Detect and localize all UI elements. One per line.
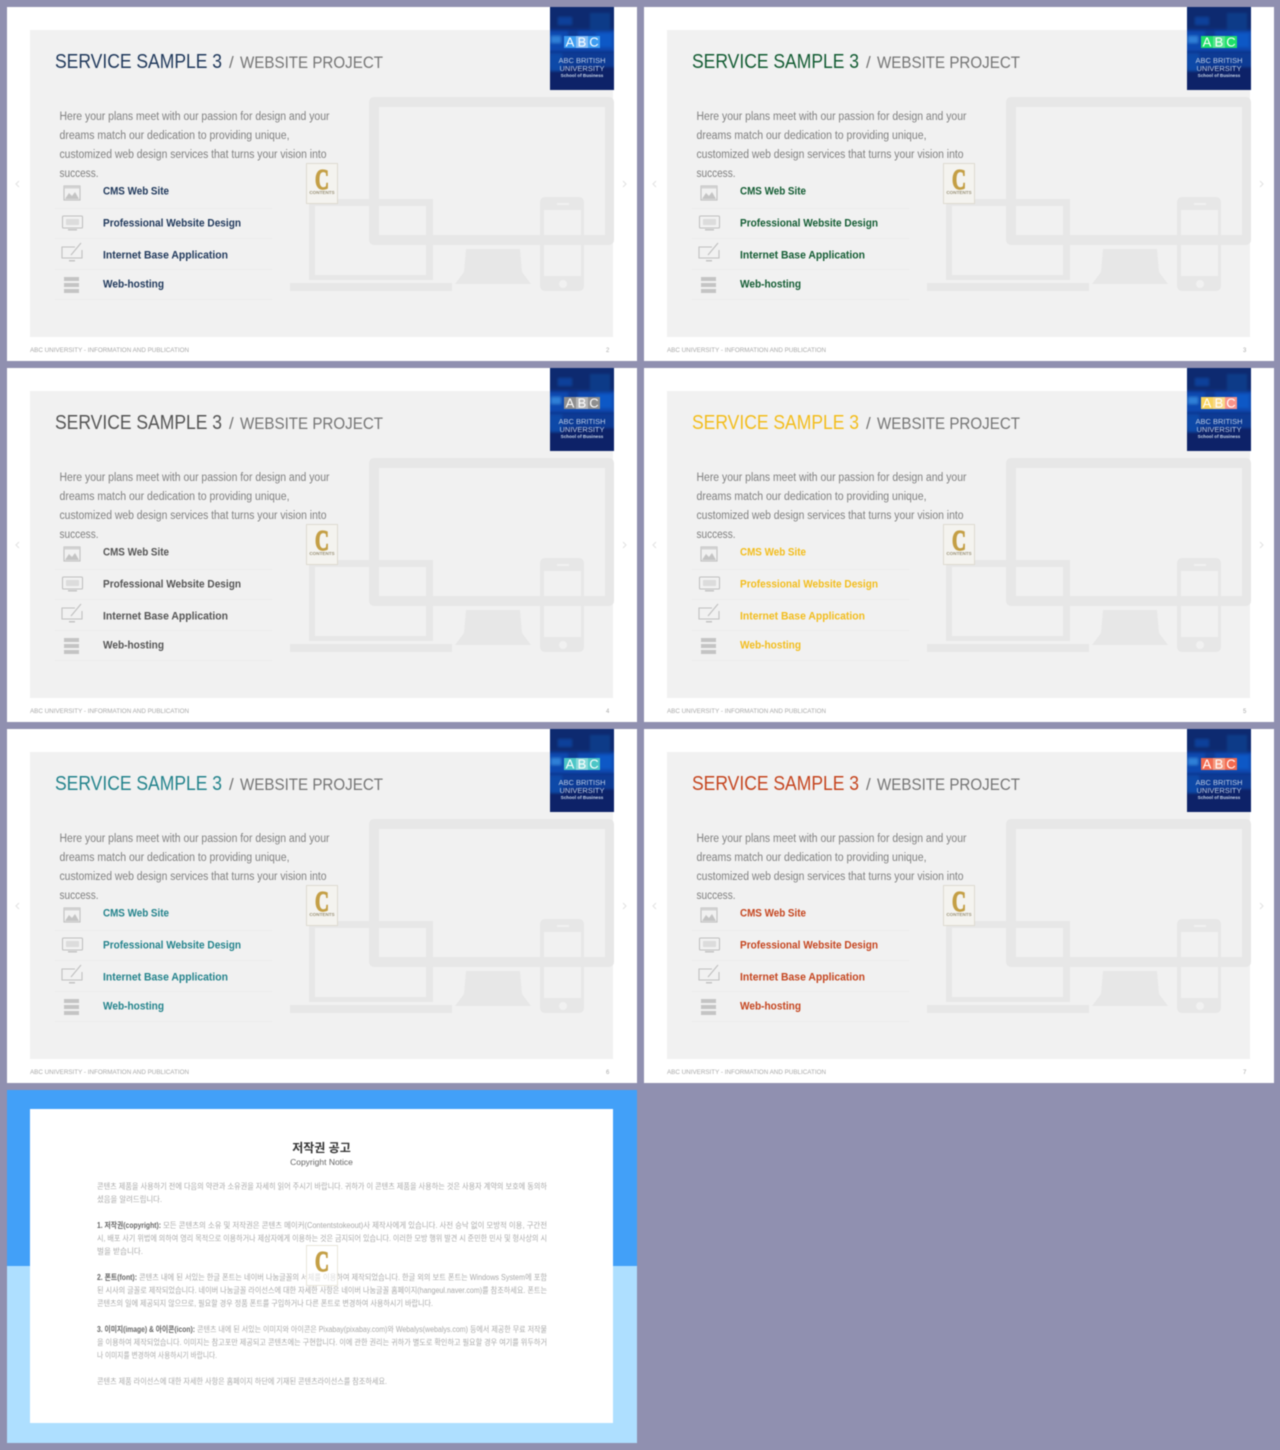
icon: image xyxy=(701,547,717,561)
panel: grey content area xyxy=(667,30,1250,337)
list labels: Web-hosting xyxy=(103,640,164,652)
text block: intro: success. xyxy=(60,529,98,541)
notice body text: 된 시사의 글꼴로 제작되었습니다. 네이버 나눔글꼴 라이선스에 대한 자세한 사항은 네이버 나눔글꼴 홈페이지(hangeul.naver.com)를 참조하세요. 폰트는 xyxy=(97,1285,547,1295)
list labels xyxy=(740,186,878,290)
list labels xyxy=(103,186,241,290)
text block: intro xyxy=(60,472,330,541)
heading: WEBSITE PROJECT xyxy=(240,414,383,433)
list labels: Professional Website Design xyxy=(740,578,878,590)
text block: intro: customized web design services that turns your vision into xyxy=(60,510,326,522)
footer: 3 xyxy=(1243,348,1247,354)
heading xyxy=(55,772,383,795)
panel: grey content area xyxy=(667,752,1250,1059)
slide 2: green xyxy=(644,3,1274,361)
logo badge xyxy=(1183,364,1255,456)
logo badge: ABC BRITISH xyxy=(558,778,606,787)
text block: intro: success. xyxy=(60,890,98,902)
illustration: devices xyxy=(653,97,1263,291)
footer: 2 xyxy=(606,348,610,354)
icon: monitor xyxy=(700,938,720,952)
watermark badge: CONTENTS xyxy=(946,912,972,917)
illustration: devices xyxy=(653,458,1263,652)
panel: grey content area xyxy=(30,752,613,1059)
notice body text: 셨음을 알려드립니다. xyxy=(97,1194,162,1204)
text block: intro: Here your plans meet with our passion for design and your xyxy=(60,111,330,123)
text block: intro: Here your plans meet with our passion for design and your xyxy=(696,111,967,123)
list labels: Web-hosting xyxy=(103,278,164,290)
footer xyxy=(30,1070,610,1076)
list labels: CMS Web Site xyxy=(740,186,806,198)
logo badge: School of Business xyxy=(1198,73,1241,78)
text block: intro: dreams match our dedication to providing unique, xyxy=(696,130,926,142)
heading: / xyxy=(866,414,871,433)
text block: intro: customized web design services that turns your vision into xyxy=(696,871,964,883)
panel: grey content area xyxy=(30,391,613,698)
logo badge: School of Business xyxy=(1198,434,1241,439)
icon: edit screen xyxy=(699,243,719,262)
list labels: Professional Website Design xyxy=(103,940,241,952)
notice body text: 시, 배포 사기 위법에 의하여 영리 목적으로 이용하거나 제삼자에게 이용하는 것은 금지되어 있습니다. 이러한 모방 행위 발견 시 준민한 민사 및 형사상의 시 xyxy=(97,1233,547,1243)
text block: intro: success. xyxy=(60,168,98,180)
icon: server xyxy=(701,277,716,293)
logo badge: B xyxy=(578,34,586,50)
list labels: Internet Base Application xyxy=(740,972,865,984)
heading xyxy=(55,50,383,73)
list labels: Web-hosting xyxy=(103,1000,164,1012)
heading: SERVICE SAMPLE 3 xyxy=(55,772,222,795)
text block: intro xyxy=(696,472,967,541)
service list xyxy=(55,546,272,660)
icon: monitor xyxy=(62,938,82,952)
icon: image xyxy=(64,547,80,561)
text block: intro: Here your plans meet with our passion for design and your xyxy=(60,472,330,484)
heading: WEBSITE PROJECT xyxy=(240,53,383,72)
slide 4: yellow xyxy=(644,364,1274,722)
panel: grey content area xyxy=(667,391,1250,698)
text block: intro: dreams match our dedication to providing unique, xyxy=(696,491,926,503)
logo badge: A xyxy=(1203,756,1212,772)
logo badge: B xyxy=(1215,34,1223,50)
footer: 4 xyxy=(606,709,610,715)
icon: monitor xyxy=(62,577,82,592)
icon: server xyxy=(701,999,716,1015)
notice body text xyxy=(97,1181,548,1386)
icon: server xyxy=(64,277,79,293)
footer: 6 xyxy=(606,1070,610,1076)
watermark badge: CONTENTS xyxy=(309,912,335,917)
watermark badge xyxy=(306,164,338,204)
logo badge: C xyxy=(1226,34,1236,50)
logo badge xyxy=(1183,3,1255,95)
heading: WEBSITE PROJECT xyxy=(877,53,1020,72)
list labels: Internet Base Application xyxy=(103,972,228,984)
watermark badge: C xyxy=(315,165,329,196)
panel: white notice card xyxy=(30,1109,613,1423)
list labels: Professional Website Design xyxy=(103,218,241,230)
watermark badge: CONTENTS xyxy=(946,190,972,195)
watermark badge xyxy=(306,524,338,564)
list labels: Professional Website Design xyxy=(740,218,878,230)
icon: edit screen xyxy=(699,965,719,984)
heading: WEBSITE PROJECT xyxy=(877,414,1020,433)
text block: intro: dreams match our dedication to providing unique, xyxy=(696,852,926,864)
heading xyxy=(692,50,1020,73)
icon: server xyxy=(64,999,79,1015)
footer: 7 xyxy=(1243,1070,1247,1076)
logo badge: UNIVERSITY xyxy=(1196,425,1242,434)
footer: ABC UNIVERSITY - INFORMATION AND PUBLICATION xyxy=(30,1070,189,1076)
footer xyxy=(667,1070,1247,1076)
logo badge: UNIVERSITY xyxy=(559,64,605,73)
notice body text: 벌을 받습니다. xyxy=(97,1246,143,1256)
heading: / xyxy=(229,775,234,794)
notice body text: 콘텐츠 제품을 사용하기 전에 다음의 약관과 소유권을 자세히 읽어 주시기 바랍니다. 귀하가 이 콘텐츠 제품을 사용하는 것은 사용자 계약의 보호에 동의하 xyxy=(97,1181,548,1191)
watermark badge: CONTENTS xyxy=(309,190,335,195)
logo badge: B xyxy=(1215,396,1223,410)
watermark badge: C xyxy=(952,526,966,557)
service list xyxy=(55,186,272,300)
footer xyxy=(30,348,610,354)
logo badge xyxy=(546,364,618,456)
notice body text: 3. 이미지(image) & 아이콘(icon): xyxy=(97,1324,195,1334)
service list xyxy=(692,546,909,660)
logo badge: School of Business xyxy=(1198,795,1241,800)
logo badge: ABC BRITISH xyxy=(558,56,606,65)
list labels: Professional Website Design xyxy=(103,578,241,590)
list labels xyxy=(103,546,241,652)
logo badge: ABC BRITISH xyxy=(1195,778,1243,787)
text block: intro: customized web design services that turns your vision into xyxy=(696,149,964,161)
icon: edit screen xyxy=(699,604,719,622)
watermark badge: C xyxy=(315,526,329,557)
list labels: CMS Web Site xyxy=(103,908,169,920)
list labels: Professional Website Design xyxy=(740,940,878,952)
heading xyxy=(55,411,383,434)
logo badge: ABC BRITISH xyxy=(1195,417,1243,426)
icon: edit screen xyxy=(62,243,82,262)
icon: image xyxy=(701,908,717,922)
logo badge: A xyxy=(1203,34,1212,50)
logo badge: B xyxy=(1215,756,1223,772)
list labels: CMS Web Site xyxy=(740,908,806,920)
heading: / xyxy=(229,414,234,433)
list labels: CMS Web Site xyxy=(103,186,169,198)
heading: SERVICE SAMPLE 3 xyxy=(692,50,859,73)
service list xyxy=(692,908,909,1022)
heading: / xyxy=(866,775,871,794)
list labels: Internet Base Application xyxy=(740,250,865,262)
text block: intro xyxy=(60,111,330,180)
list labels: Internet Base Application xyxy=(103,250,228,262)
watermark badge: CONTENTS xyxy=(946,551,972,556)
footer: ABC UNIVERSITY - INFORMATION AND PUBLICATION xyxy=(667,709,826,715)
watermark badge: C xyxy=(315,887,329,918)
notice title xyxy=(290,1140,353,1167)
logo badge: UNIVERSITY xyxy=(1196,786,1242,795)
heading: WEBSITE PROJECT xyxy=(240,775,383,794)
text block: intro: success. xyxy=(696,168,736,180)
watermark badge: CONTENTS xyxy=(309,551,335,556)
notice body text: 콘텐츠 내에 된 서있는 이미지와 아이콘은 Pixabay(pixabay.com)와 Webalys(webalys.com) 등에서 제공한 무료 저작물 xyxy=(197,1324,547,1334)
heading: SERVICE SAMPLE 3 xyxy=(692,411,859,434)
watermark badge xyxy=(944,164,974,204)
list labels xyxy=(740,546,878,652)
footer: ABC UNIVERSITY - INFORMATION AND PUBLICATION xyxy=(667,1070,826,1076)
logo badge: ABC BRITISH xyxy=(558,417,606,426)
watermark badge: C xyxy=(952,887,966,918)
list labels xyxy=(740,908,878,1012)
notice title: Copyright Notice xyxy=(290,1157,353,1167)
text block: intro: customized web design services that turns your vision into xyxy=(696,510,964,522)
notice body text: 2. 폰트(font): xyxy=(97,1273,137,1282)
logo badge xyxy=(1183,725,1255,817)
heading: / xyxy=(229,53,234,72)
text block: intro: Here your plans meet with our passion for design and your xyxy=(696,472,967,484)
logo badge xyxy=(546,3,618,95)
notice title: 저작권 공고 xyxy=(292,1140,351,1155)
logo badge: UNIVERSITY xyxy=(1196,64,1242,73)
heading: SERVICE SAMPLE 3 xyxy=(55,50,222,73)
logo badge: School of Business xyxy=(561,434,604,439)
slide 3: grey xyxy=(7,364,637,722)
notice body text: 콘텐츠 제품 라이선스에 대한 자세한 사항은 홈페이지 하단에 기재된 콘텐츠라이선스를 참조하세요. xyxy=(97,1376,387,1386)
notice body text: 나 이미지를 변경하여 사용하시기 바랍니다. xyxy=(97,1350,217,1360)
footer xyxy=(30,709,610,715)
text block: intro: customized web design services that turns your vision into xyxy=(60,149,326,161)
footer: 5 xyxy=(1243,709,1247,715)
footer: ABC UNIVERSITY - INFORMATION AND PUBLICATION xyxy=(30,348,189,354)
list labels: CMS Web Site xyxy=(103,546,169,558)
slide 6: red xyxy=(644,725,1274,1083)
watermark badge xyxy=(306,886,338,926)
heading xyxy=(692,772,1020,795)
icon: edit screen xyxy=(62,965,82,984)
text block: intro: dreams match our dedication to providing unique, xyxy=(60,852,290,864)
notice body text: 콘텐츠 내에 된 서있는 한글 폰트는 네이버 나눔글꼴의 서체를 이용하여 제작되었습니다. 한글 외의 보트 폰트는 Windows System에 포함 xyxy=(139,1272,548,1282)
text block: intro: dreams match our dedication to providing unique, xyxy=(60,130,290,142)
icon: monitor xyxy=(700,216,720,230)
list labels: Web-hosting xyxy=(740,1000,801,1012)
slide 7: copyright notice xyxy=(7,1090,637,1443)
logo badge: A xyxy=(566,396,575,410)
text block: intro xyxy=(696,833,967,902)
footer: ABC UNIVERSITY - INFORMATION AND PUBLICATION xyxy=(30,709,189,715)
logo badge: C xyxy=(1226,756,1236,772)
notice body text: 을 이용하여 제작되었습니다. 이미지는 참고포만 제공되고 콘텐츠에는 구현합니다. 이에 관한 권리는 귀하가 별도로 확인하고 필요할 경우 여기를 위두하거 xyxy=(97,1337,547,1347)
illustration: devices xyxy=(16,819,626,1013)
list labels: Internet Base Application xyxy=(103,610,228,622)
icon: image xyxy=(64,186,80,200)
notice body text: 콘텐츠의 일에 제공되지 않으므로, 필요할 경우 정품 폰트를 구입하거나 다른 폰트로 변경하여 사용하시기 바랍니다. xyxy=(97,1298,433,1308)
logo badge: School of Business xyxy=(561,73,604,78)
logo badge: B xyxy=(578,756,586,772)
notice body text: 모든 콘텐츠의 소유 및 저작권은 콘텐츠 메이커(Contentstokeout)사 제작사에게 있습니다. 사전 승낙 없이 모방적 이용, 구간전 xyxy=(163,1220,547,1230)
heading: SERVICE SAMPLE 3 xyxy=(55,411,222,434)
icon: monitor xyxy=(62,216,82,230)
text block: intro: success. xyxy=(696,890,736,902)
illustration: devices xyxy=(16,97,626,291)
watermark badge xyxy=(944,524,974,564)
list labels xyxy=(103,908,241,1012)
icon: monitor xyxy=(700,577,720,592)
panel: grey content area xyxy=(30,30,613,337)
text block: intro xyxy=(696,111,967,180)
heading: SERVICE SAMPLE 3 xyxy=(692,772,859,795)
icon: edit screen xyxy=(62,604,82,622)
text block: intro: Here your plans meet with our passion for design and your xyxy=(696,833,967,845)
list labels: Web-hosting xyxy=(740,640,801,652)
icon: server xyxy=(701,638,716,654)
watermark badge: C xyxy=(315,1247,329,1278)
icon: image xyxy=(701,186,717,200)
illustration: devices xyxy=(653,819,1263,1013)
logo badge: School of Business xyxy=(561,795,604,800)
logo badge xyxy=(546,725,618,817)
logo badge: UNIVERSITY xyxy=(559,425,605,434)
heading: WEBSITE PROJECT xyxy=(877,775,1020,794)
slide 5: teal xyxy=(7,725,637,1083)
logo badge: B xyxy=(578,396,586,410)
text block: intro: customized web design services that turns your vision into xyxy=(60,871,326,883)
icon: image xyxy=(64,908,80,922)
footer: ABC UNIVERSITY - INFORMATION AND PUBLICATION xyxy=(667,348,826,354)
watermark badge xyxy=(944,886,974,926)
watermark badge xyxy=(306,1246,338,1286)
icon: server xyxy=(64,638,79,654)
notice body text: 1. 저작권(copyright): xyxy=(97,1220,161,1230)
service list xyxy=(55,908,272,1022)
list labels: CMS Web Site xyxy=(740,546,806,558)
text block: intro: success. xyxy=(696,529,736,541)
logo badge: C xyxy=(1226,396,1236,410)
footer xyxy=(667,348,1247,354)
text block: intro xyxy=(60,833,330,902)
heading xyxy=(692,411,1020,434)
footer xyxy=(667,709,1247,715)
heading: / xyxy=(866,53,871,72)
logo badge: UNIVERSITY xyxy=(559,786,605,795)
text block: intro: Here your plans meet with our passion for design and your xyxy=(60,833,330,845)
logo badge: C xyxy=(589,34,599,50)
slide 1: navy xyxy=(7,3,637,361)
text block: intro: dreams match our dedication to providing unique, xyxy=(60,491,290,503)
list labels: Internet Base Application xyxy=(740,610,865,622)
logo badge: A xyxy=(566,34,575,50)
illustration: devices xyxy=(16,458,626,652)
logo badge: A xyxy=(1203,396,1212,410)
service list xyxy=(692,186,909,300)
logo badge: ABC BRITISH xyxy=(1195,56,1243,65)
logo badge: A xyxy=(566,756,575,772)
list labels: Web-hosting xyxy=(740,278,801,290)
logo badge: C xyxy=(589,396,599,410)
watermark badge: C xyxy=(952,165,966,196)
logo badge: C xyxy=(589,756,599,772)
